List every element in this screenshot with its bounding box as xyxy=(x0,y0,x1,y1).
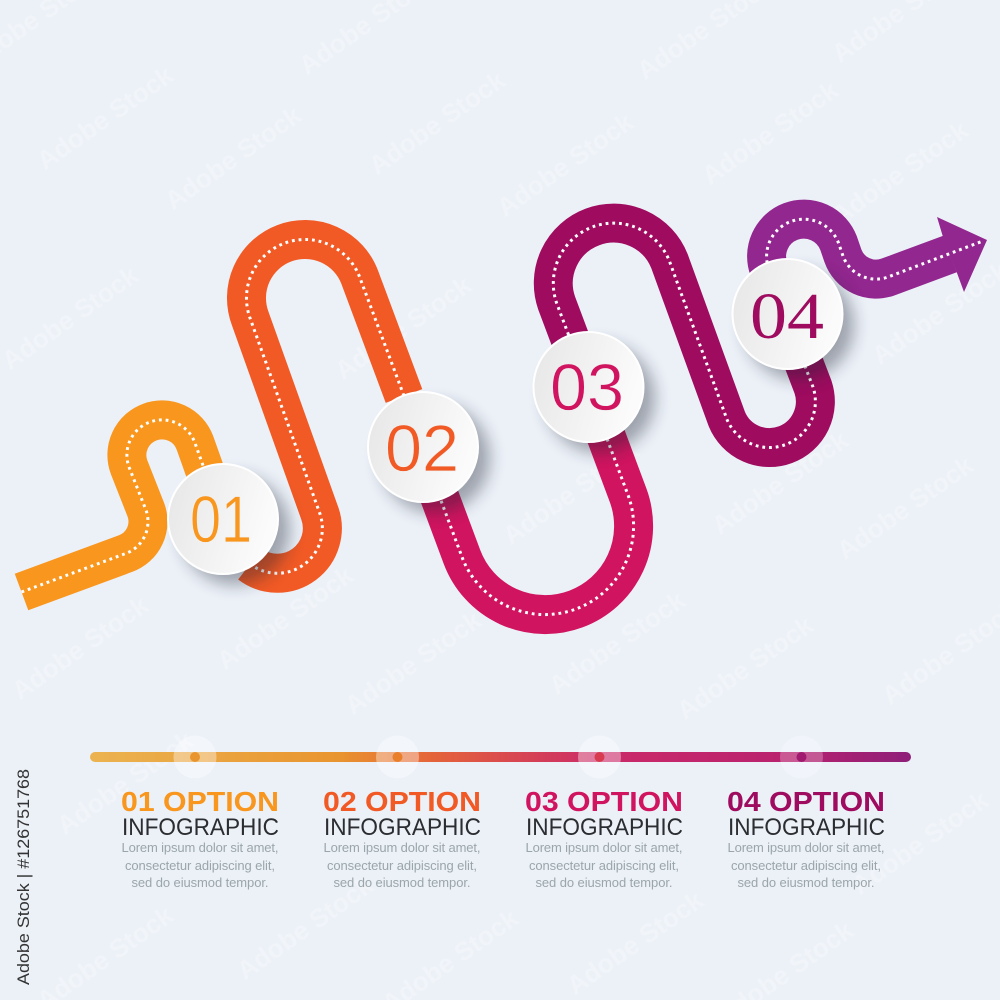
text: Adobe Stock xyxy=(831,449,979,565)
marker 04 xyxy=(732,259,854,380)
option 04 text block: INFOGRAPHIC xyxy=(728,814,885,841)
option 03 text block: consectetur adipiscing elit, xyxy=(529,858,679,873)
marker 01: 01 xyxy=(190,482,252,556)
option 03 text block: INFOGRAPHIC xyxy=(526,814,683,841)
text: Adobe Stock xyxy=(491,106,639,222)
text: Adobe Stock xyxy=(159,99,307,215)
option 01 text block: Lorem ipsum dolor sit amet, xyxy=(122,840,278,855)
text: Adobe Stock xyxy=(671,609,819,725)
text: Adobe Stock xyxy=(706,424,854,540)
option 04 text block xyxy=(727,786,885,890)
option 04 text block: consectetur adipiscing elit, xyxy=(731,858,881,873)
timeline bar xyxy=(90,736,911,778)
road segment 3b: magenta xyxy=(553,223,815,448)
stock id side label: Adobe Stock | #126751768 xyxy=(15,769,33,985)
marker 02: 02 xyxy=(385,411,459,485)
road segment 2: orange-red xyxy=(246,239,404,573)
text: Adobe Stock xyxy=(329,269,477,385)
timeline marker 1 xyxy=(174,736,216,778)
text: Adobe Stock xyxy=(51,724,199,840)
option 02 text block: sed do eiusmod tempor. xyxy=(334,875,470,890)
option 01 text block: consectetur adipiscing elit, xyxy=(125,858,275,873)
text: Adobe Stock xyxy=(31,59,179,175)
text: Adobe Stock xyxy=(339,604,487,720)
text: Adobe Stock xyxy=(696,74,844,190)
option 04 text block: 04 OPTION xyxy=(727,786,885,817)
marker 02 xyxy=(368,392,490,513)
timeline marker 3 xyxy=(578,736,621,778)
option 03 text block: sed do eiusmod tempor. xyxy=(536,875,672,890)
timeline marker 2 xyxy=(376,736,419,778)
text: Adobe Stock xyxy=(231,869,379,985)
text: Adobe Stock xyxy=(6,589,154,705)
text: Adobe Stock xyxy=(826,114,974,230)
text: Adobe Stock xyxy=(846,784,994,900)
option 03 text block xyxy=(525,786,683,890)
option 02 text block: 02 OPTION xyxy=(323,786,481,817)
option 01 text block: 01 OPTION xyxy=(121,786,279,817)
option 02 text block: INFOGRAPHIC xyxy=(324,814,481,841)
road segment 1: orange xyxy=(22,420,211,592)
timeline marker 4 xyxy=(780,736,823,778)
option 01 text block: INFOGRAPHIC xyxy=(122,814,279,841)
option 03 text block: 03 OPTION xyxy=(525,786,683,817)
text: Adobe Stock xyxy=(363,64,511,180)
text: Adobe Stock xyxy=(211,559,359,675)
option 02 text block xyxy=(323,786,481,890)
text: Adobe Stock xyxy=(543,584,691,700)
text: Adobe Stock xyxy=(0,259,144,375)
option 02 text block: Lorem ipsum dolor sit amet, xyxy=(324,840,480,855)
marker 04: 04 xyxy=(750,280,824,353)
winding road xyxy=(22,217,987,615)
option 04 text block: sed do eiusmod tempor. xyxy=(738,875,874,890)
option 01 text block xyxy=(121,786,279,890)
marker 03: 03 xyxy=(550,350,624,424)
text: Adobe Stock xyxy=(561,884,709,1000)
option 01 text block: sed do eiusmod tempor. xyxy=(132,875,268,890)
option 04 text block: Lorem ipsum dolor sit amet, xyxy=(728,840,884,855)
option 03 text block: Lorem ipsum dolor sit amet, xyxy=(526,840,682,855)
road segment 3: crimson xyxy=(427,420,634,615)
marker 01 xyxy=(168,464,290,585)
marker 03 xyxy=(534,332,655,453)
option 02 text block: consectetur adipiscing elit, xyxy=(327,858,477,873)
text: Adobe Stock xyxy=(497,434,645,550)
road segment 4: purple with arrow xyxy=(767,217,987,292)
